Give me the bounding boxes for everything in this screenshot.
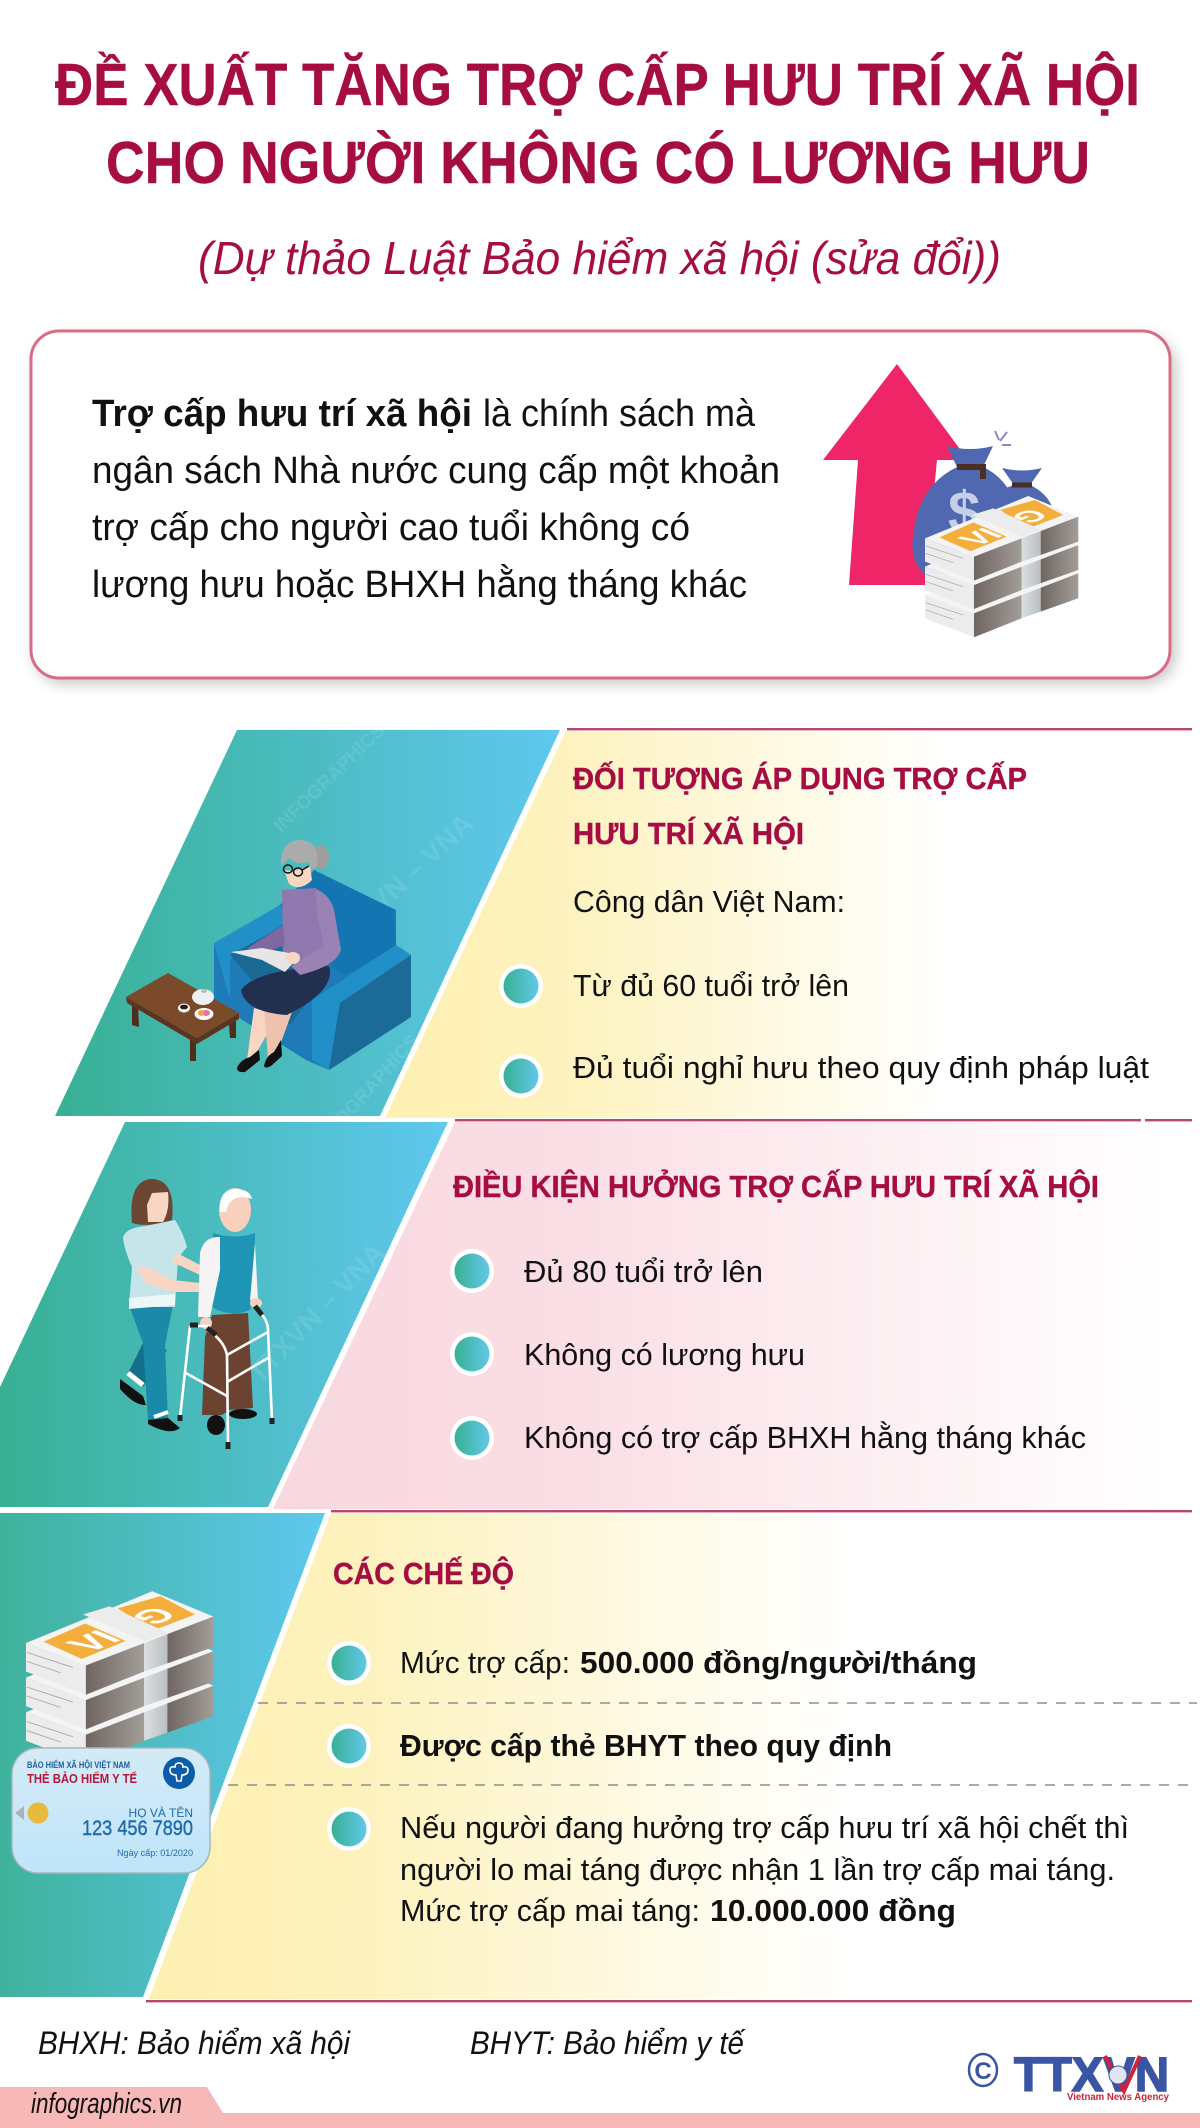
walker: [180, 1306, 272, 1449]
bullet: allowance amount: Mức trợ cấp:: [400, 1645, 570, 1680]
bullet: allowance amount: 500.000 đồng/người/tháng: [580, 1645, 977, 1680]
watermarks: INFOGRAPHICS: [270, 720, 389, 837]
illustration: money stack: G: [122, 1603, 186, 1629]
panel: definition box: [31, 331, 1176, 684]
bullet: no pension: Không có lương hưu: [524, 1337, 805, 1372]
definition text: [92, 393, 780, 606]
icon: money stack: [925, 496, 1078, 637]
illustration: health insurance card: 123 456 7890: [82, 1817, 193, 1840]
legend: abbreviations: [38, 2025, 746, 2061]
icon: red up arrow: [823, 364, 968, 585]
bullet: retirement age: Đủ tuổi nghỉ hưu theo quy định pháp luật: [573, 1050, 1149, 1085]
bullet: funeral allowance: Mức trợ cấp mai táng:: [400, 1893, 700, 1928]
bullet: no other monthly allowance: Không có trợ cấp BHXH hằng tháng khác: [524, 1420, 1086, 1455]
logo: TTXVN: C: [974, 2058, 992, 2085]
panel 3 illustration background: [0, 1513, 325, 1997]
bullet: health insurance card: [327, 1724, 892, 1768]
panel 2: conditions: [0, 1119, 1192, 1509]
panel 1 intro: Công dân Việt Nam:: [573, 884, 845, 919]
footer band: infographics.vn: [31, 2088, 182, 2120]
illustration: health insurance card: HỌ VÀ TÊN: [129, 1805, 193, 1820]
bullet: no pension: [450, 1332, 805, 1376]
bullet: allowance amount: [327, 1641, 977, 1685]
legend: abbreviations: BHXH: Bảo hiểm xã hội: [38, 2025, 351, 2061]
panel 3: benefits: [0, 1510, 1197, 2002]
illustration: elderly woman reading on a sofa: [126, 840, 411, 1072]
sofa: [214, 870, 411, 1070]
panel 1 illustration background: [55, 730, 560, 1116]
panel 1 heading: [573, 760, 1027, 851]
panel 2 heading: ĐIỀU KIỆN HƯỞNG TRỢ CẤP HƯU TRÍ XÃ HỘI: [453, 1168, 1099, 1204]
bullet: age 80: [450, 1249, 763, 1293]
bullet: funeral allowance: [327, 1807, 1129, 1928]
panel 1 text background: [385, 728, 1192, 1118]
bullet: health insurance card: Được cấp thẻ BHYT theo quy định: [400, 1728, 892, 1763]
bullet: funeral allowance: Nếu người đang hưởng trợ cấp hưu trí xã hội chết thì: [400, 1810, 1129, 1845]
panel 1: target group: [55, 720, 1192, 1153]
bullet: no other monthly allowance: [450, 1416, 1086, 1460]
icon: money stack: VI: [950, 524, 1011, 549]
watermarks: TTXVN – VNA: [242, 1237, 391, 1389]
old man: [198, 1188, 262, 1435]
watermarks: [270, 720, 479, 1153]
bullet: funeral allowance: 10.000.000 đồng: [710, 1893, 956, 1928]
icon: money stack: G: [1003, 505, 1055, 527]
panel 1 heading: ĐỐI TƯỢNG ÁP DỤNG TRỢ CẤP: [573, 760, 1027, 796]
panel 3 heading: CÁC CHẾ ĐỘ: [333, 1555, 514, 1591]
definition text: lương hưu hoặc BHXH hằng tháng khác: [92, 563, 747, 606]
watermarks: TTXVN – VNA: [325, 808, 479, 954]
definition text: là chính sách mà: [483, 393, 756, 435]
logo: TTXVN: Vietnam News Agency: [1067, 2092, 1169, 2103]
illustration: caregiver helping an old man with a walker: [120, 1179, 272, 1449]
coffee table: [126, 973, 239, 1061]
watermarks: INFOGRAPHICS: [310, 1031, 423, 1153]
illustration: health insurance card: Ngày cấp: 01/2020: [117, 1848, 193, 1858]
woman: [231, 840, 341, 1072]
subtitle: (Dự thảo Luật Bảo hiểm xã hội (sửa đổi)): [198, 232, 1001, 284]
title: [55, 51, 1140, 196]
illustration: money stack: [26, 1591, 213, 1764]
bullet: retirement age: [499, 1050, 1149, 1098]
illustration: health insurance card: THẺ BẢO HIỂM Y TẾ: [27, 1771, 137, 1786]
definition text: trợ cấp cho người cao tuổi không có: [92, 507, 690, 549]
illustration: money stack: VI: [58, 1626, 131, 1657]
panel 1 heading: HƯU TRÍ XÃ HỘI: [573, 815, 804, 851]
legend: abbreviations: BHYT: Bảo hiểm y tế: [470, 2025, 746, 2061]
bullet: age 60: Từ đủ 60 tuổi trở lên: [573, 968, 849, 1003]
definition text: ngân sách Nhà nước cung cấp một khoản: [92, 450, 780, 492]
definition text: Trợ cấp hưu trí xã hội: [92, 393, 472, 435]
panel 2 text background: [273, 1119, 1192, 1509]
panel 2 illustration background: [0, 1122, 448, 1507]
bullet: age 60: [499, 964, 849, 1008]
dashed separators: [228, 1703, 1197, 1785]
logo: TTXVN: TTXVN: [1014, 2049, 1169, 2102]
panel 3 text background: [146, 1510, 1192, 2002]
bullet: age 80: Đủ 80 tuổi trở lên: [524, 1254, 763, 1289]
caregiver: [120, 1179, 201, 1431]
illustration: health insurance card: [12, 1748, 210, 1873]
title: CHO NGƯỜI KHÔNG CÓ LƯƠNG HƯU: [106, 129, 1090, 196]
bullet: funeral allowance: người lo mai táng được nhận 1 lần trợ cấp mai táng.: [400, 1852, 1115, 1887]
footer band: [0, 2087, 1200, 2128]
icon: money bags: [912, 431, 1056, 575]
icon: money bags: $: [948, 480, 980, 545]
illustration: health insurance card: BẢO HIỂM XÃ HỘI VIỆT NAM: [27, 1759, 130, 1770]
